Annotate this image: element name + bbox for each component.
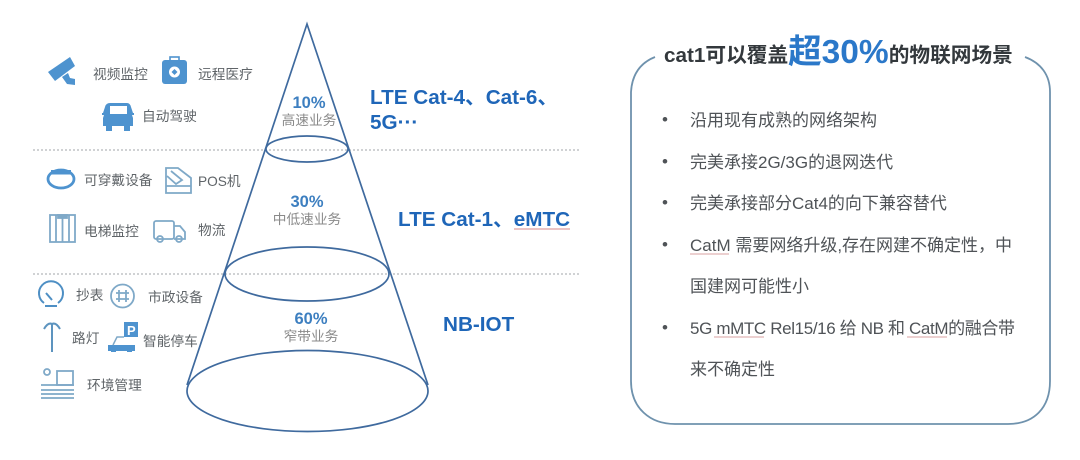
panel heading: 的物联网场景 (889, 44, 1013, 67)
label: video surveillance: 视频监控 (93, 67, 148, 82)
icon: meter gauge (39, 281, 63, 306)
technology label: high speed: LTE Cat-4、Cat-6、 (370, 86, 558, 109)
panel heading: cat1可以覆盖 (664, 44, 788, 67)
icon: street lamp (44, 324, 60, 352)
icon: car (102, 103, 134, 131)
label: wearable devices: 可穿戴设备 (84, 172, 153, 188)
bullet list: • (662, 318, 668, 337)
tier 10% label (282, 94, 337, 128)
panel: cat1 scenarios (631, 34, 1050, 424)
spell-check underlines (690, 254, 947, 337)
tier 30% label: 中低速业务 (273, 212, 342, 227)
icon: elevator (50, 215, 75, 242)
icon: environmental management (41, 369, 74, 398)
bullet list: 完美承接2G/3G的退网迭代 (690, 153, 893, 172)
icon: smart parking (108, 322, 138, 352)
label: remote medical: 远程医疗 (198, 67, 253, 82)
icon: smart parking: P (127, 323, 136, 338)
tier 60% label (284, 310, 339, 344)
bullet list: • (662, 235, 668, 254)
label: POS: POS机 (198, 174, 241, 189)
bullet list: • (662, 110, 668, 129)
bullet list: • (662, 152, 668, 171)
bullet list: 来不确定性 (690, 360, 775, 379)
icon: surveillance camera (48, 57, 75, 85)
label: elevator monitoring: 电梯监控 (84, 224, 139, 239)
eMTC underline (514, 228, 570, 230)
technology label: high speed (370, 86, 558, 134)
label: smart parking: 智能停车 (143, 333, 198, 349)
bullet list: 沿用现有成熟的网络架构 (690, 110, 877, 130)
panel heading: 超30% (788, 34, 889, 71)
tier 10% label: 10% (292, 94, 326, 112)
bullet list (662, 110, 1015, 379)
icon: medical kit (162, 57, 187, 84)
cone diagram (187, 24, 428, 432)
icon: municipal equipment (111, 284, 134, 308)
icon: POS machine (166, 168, 191, 193)
technology label: mid speed: LTE Cat-1、eMTC (398, 208, 570, 231)
technology label: narrowband: NB-IOT (443, 313, 515, 336)
tier 30% label: 30% (290, 193, 324, 211)
label: environmental management: 环境管理 (87, 378, 142, 393)
tier 10% label: 高速业务 (282, 112, 337, 128)
label: street light: 路灯 (72, 331, 100, 346)
label: municipal equipment: 市政设备 (148, 289, 203, 305)
panel outline (631, 57, 1050, 424)
technology label: high speed: 5G··· (370, 111, 418, 134)
bullet list: 国建网可能性小 (690, 277, 809, 296)
label: meter reading: 抄表 (76, 288, 104, 303)
bullet list: 完美承接部分Cat4的向下兼容替代 (690, 194, 947, 213)
icon: delivery truck (154, 221, 185, 242)
tier 60% label: 60% (294, 310, 328, 328)
label: autonomous driving: 自动驾驶 (142, 109, 197, 124)
icon: wearable band (48, 170, 74, 188)
label: logistics: 物流 (198, 223, 226, 238)
tier 60% label: 窄带业务 (284, 328, 339, 344)
tier 30% label (273, 193, 342, 227)
bullet list: CatM 需要网络升级,存在网建不确定性，中 (690, 236, 1012, 255)
bullet list: • (662, 193, 668, 212)
bullet list: 5G mMTC Rel15/16 给 NB 和 CatM的融合带 (690, 319, 1015, 338)
